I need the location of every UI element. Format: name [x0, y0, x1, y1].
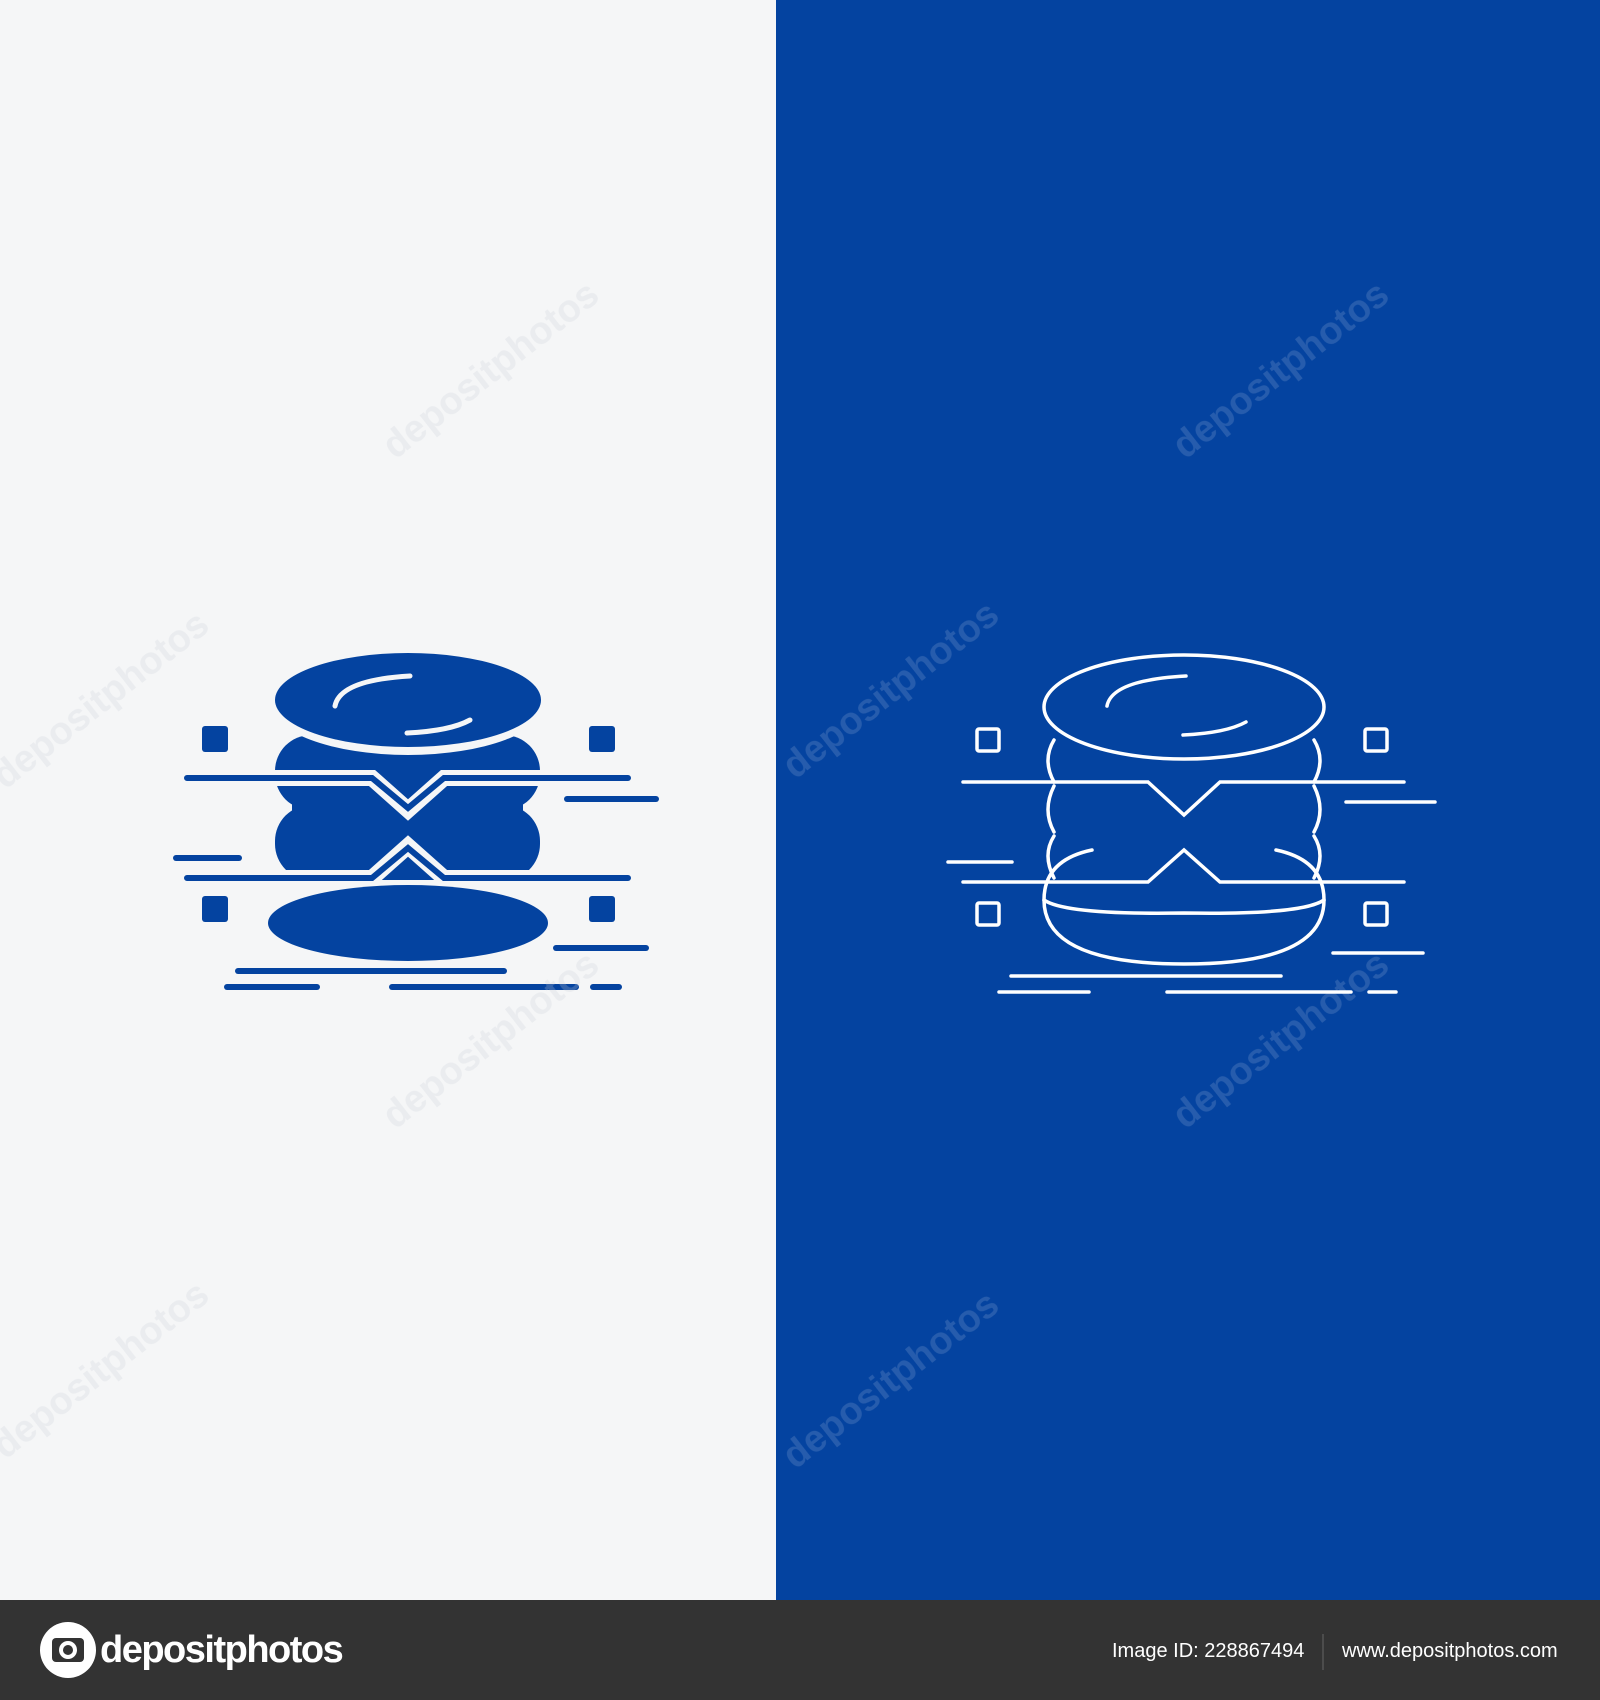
panel: right blue background: [776, 0, 1600, 1600]
watermark text: [775, 273, 1397, 1477]
top disk: [270, 651, 546, 755]
watermark text: depositphotos: [775, 593, 1007, 787]
footer bar: [0, 1600, 1600, 1700]
footer logo: depositphotos: [100, 1629, 343, 1671]
panel: left light background: [0, 0, 776, 1600]
icon: line database: [948, 655, 1435, 992]
text: depositphotos: [375, 943, 607, 1137]
footer url: www.depositphotos.com: [1341, 1640, 1558, 1662]
text: depositphotos: [375, 273, 607, 467]
watermark text: depositphotos: [1165, 943, 1397, 1137]
icon: glyph database: [176, 651, 656, 987]
bottom disk: [268, 885, 548, 961]
squares: [202, 726, 228, 752]
footer image id: Image ID: 228867494: [1112, 1640, 1304, 1662]
speed lines: [176, 799, 656, 987]
zigzag lines with white gaps: [187, 778, 628, 810]
watermark text: depositphotos: [775, 1283, 1007, 1477]
middle body: [275, 735, 540, 880]
footer logo: [40, 1622, 343, 1678]
watermark text: depositphotos: [1165, 273, 1397, 467]
